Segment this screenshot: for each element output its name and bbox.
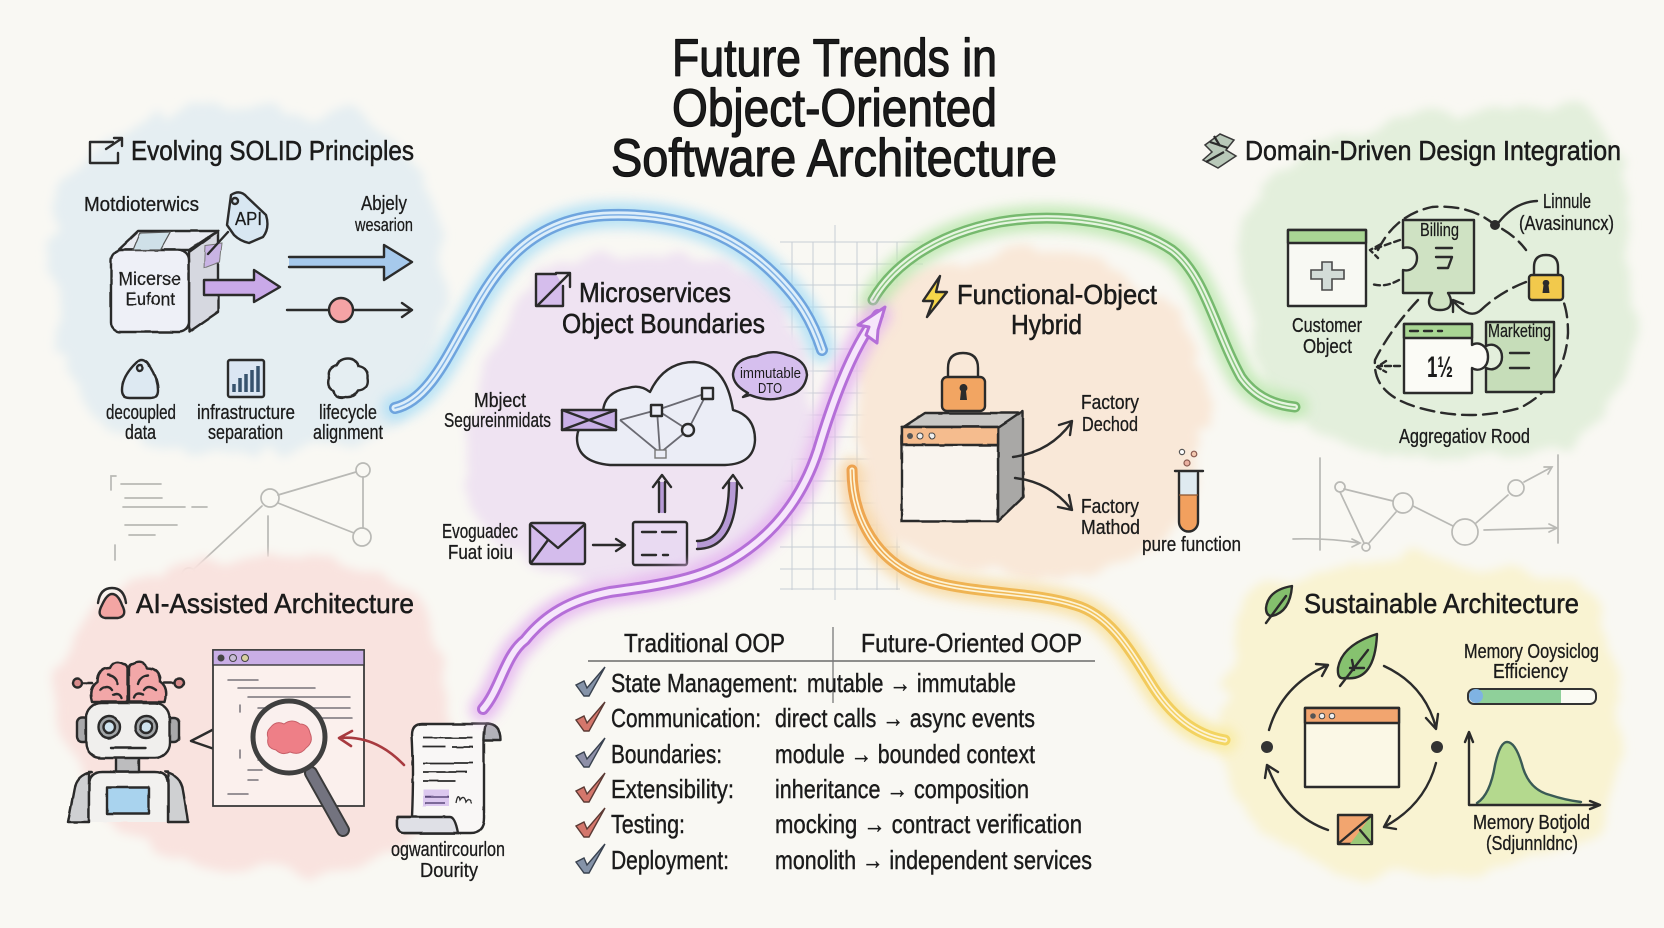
- heading: Sustainable Architecture: Sustainable Architecture: [1304, 588, 1579, 619]
- row: deployment: monolith → independent services: [775, 845, 1092, 875]
- panel: microservices object boundaries: [442, 251, 808, 582]
- label: Motdioterwics: Motdioterwics: [84, 194, 199, 216]
- arrow: lock to billing: [1453, 300, 1481, 314]
- title: [611, 29, 1057, 188]
- row: boundaries: module → bounded context: [775, 739, 1036, 769]
- label: Memory Ooysiclog Efficiency: Memory Ooysiclog: [1464, 641, 1599, 663]
- icon: lower puzzle piece: [1404, 324, 1488, 393]
- row: testing: [576, 808, 1082, 839]
- icon: scroll document: [397, 724, 500, 833]
- row: boundaries: [576, 738, 1036, 769]
- arrow: to Factory Mathod: [1015, 478, 1072, 510]
- sketch: faint network left: [111, 463, 371, 582]
- title: Software Architecture: [611, 129, 1057, 188]
- icon: customer object window: [1288, 230, 1366, 306]
- icon: large leaf: [1338, 634, 1377, 686]
- panel: functional-object hybrid: [859, 253, 1241, 576]
- label: Evoguadec Fuat ioiu: [442, 521, 518, 564]
- heading: AI-Assisted Architecture: AI-Assisted Architecture: [136, 588, 414, 619]
- row: extensibility: Extensibility:: [611, 774, 734, 804]
- label: scroll caption: Dourity: [420, 860, 478, 882]
- arrow: to Factory Dechod: [1013, 421, 1072, 457]
- callout: immutable DTO: immutable: [740, 365, 801, 382]
- icon: code window: [213, 650, 364, 806]
- heading: Microservices Object Boundaries: [536, 273, 765, 339]
- row: deployment: Deployment:: [611, 845, 729, 875]
- icon: lifecycle cloud: [328, 358, 367, 397]
- label: lifecycle alignment: lifecycle: [319, 402, 377, 424]
- icon: microservice box: Micerse: [118, 269, 181, 289]
- label: Memory Ooysiclog Efficiency: [1464, 641, 1599, 683]
- ribbon: blue flow: [395, 215, 822, 408]
- icon: boundary dot and leader: [1490, 201, 1537, 230]
- icon: object box window: [902, 411, 1023, 521]
- icon: dashed aggregate boundary: [1375, 207, 1568, 415]
- label: scroll caption: [391, 839, 505, 882]
- icon: microservice box: Eufont: [125, 289, 175, 309]
- callout: immutable DTO: [733, 352, 807, 399]
- progress bar: memory efficiency: [1468, 689, 1596, 704]
- arrow: purple: [204, 270, 280, 302]
- icon: yellow lock: [1529, 255, 1563, 300]
- icon: robot with brain: [68, 662, 188, 822]
- label: Evoguadec Fuat ioiu: Fuat ioiu: [448, 542, 513, 564]
- row: deployment: [576, 844, 1092, 875]
- row: boundaries: Boundaries:: [611, 739, 722, 769]
- table header: Future-Oriented OOP: [861, 628, 1082, 658]
- row: testing: Testing:: [611, 809, 685, 839]
- icon: billing puzzle piece: Billing: [1420, 220, 1459, 240]
- sketch: faint network right: [1293, 455, 1558, 551]
- icon: marketing puzzle piece: Marketing: [1488, 321, 1551, 341]
- heading: Microservices Object Boundaries: Object Boundaries: [562, 308, 765, 339]
- ribbon: orange-yellow flow: [852, 470, 1225, 740]
- heading: Functional-Object Hybrid: [923, 276, 1157, 340]
- panel: evolving SOLID principles: [51, 107, 443, 452]
- callout: immutable DTO: DTO: [758, 380, 782, 397]
- arrow: blue: [289, 245, 412, 280]
- label: Lnnule note: Linnule: [1543, 191, 1591, 213]
- comparison table: traditional vs future OOP: [576, 627, 1095, 875]
- label: decoupled data: [106, 402, 176, 444]
- label: Aggregatiov Rood: Aggregatiov Rood: [1399, 426, 1530, 448]
- label: Factory Mathod: Mathod: [1081, 517, 1140, 539]
- heading: Sustainable Architecture: [1266, 586, 1579, 623]
- label: Customer Object: Customer: [1292, 315, 1362, 337]
- label: decoupled data: data: [125, 422, 157, 444]
- icon: cloud with object network: [577, 362, 755, 465]
- heading: Microservices Object Boundaries: Microservices: [579, 277, 731, 308]
- label: infrastructure separation: infrastructure: [197, 402, 295, 424]
- label: Abjely: Abjely: [361, 193, 407, 215]
- label: Customer Object: Object: [1303, 336, 1352, 358]
- icon: API tag: API: [235, 209, 262, 229]
- icon: chevron callout: [191, 727, 223, 752]
- label: Memory Botjold: Memory Botjold: [1473, 812, 1590, 834]
- row: extensibility: inheritance → composition: [775, 774, 1029, 804]
- icon: padlock: [942, 353, 985, 411]
- row: communication: direct calls → async events: [775, 703, 1035, 733]
- row: communication: Communication:: [611, 703, 761, 733]
- arrow: red to magnifier: [339, 731, 404, 765]
- arrow: box up to cloud: [653, 475, 671, 513]
- ribbon: green flow: [873, 218, 1295, 407]
- row: extensibility: [576, 773, 1029, 804]
- icon: lifecycle arrows: [1261, 664, 1443, 830]
- heading: Functional-Object Hybrid: Functional-Object: [957, 279, 1157, 310]
- label: Lnnule note: [1519, 191, 1614, 235]
- icon: decoupled data: [122, 360, 158, 398]
- row: state management: State Management:: [611, 668, 798, 698]
- table header: [588, 627, 1095, 703]
- label: decoupled data: decoupled: [106, 402, 176, 424]
- label: Factory Mathod: [1081, 496, 1140, 539]
- icon: magnifier: [253, 701, 343, 830]
- arrows: dashed to customer: [1370, 240, 1400, 285]
- panel: sustainable architecture: [1219, 560, 1619, 873]
- icon: test tube: [1175, 449, 1203, 532]
- label: Memory Botjold: (Sdjunnldnc): [1486, 833, 1578, 855]
- arrow: curved up to cloud: [697, 475, 742, 549]
- label: Factory Dechod: Factory: [1081, 392, 1139, 414]
- table header: Traditional OOP: [624, 628, 785, 658]
- icon: API tag: [208, 192, 267, 254]
- label: Mbject Segureinmidats: Mbject: [474, 390, 526, 412]
- label: Factory Dechod: [1081, 392, 1139, 436]
- row: state management: mutable → immutable: [807, 668, 1016, 698]
- central sketch grid: [780, 225, 923, 600]
- icon: envelope object: [562, 410, 616, 430]
- icon: infrastructure bars: [228, 360, 264, 397]
- label: lifecycle alignment: [313, 402, 383, 444]
- label: scroll caption: ogwantircourlon: [391, 839, 505, 861]
- row: communication: [576, 702, 1035, 733]
- panel: AI-assisted architecture: [55, 556, 505, 882]
- icon: message box: [633, 522, 687, 565]
- icon: envelope event: [530, 523, 585, 564]
- label: Factory Dechod: Dechod: [1082, 414, 1138, 436]
- ribbon: purple flow with arrowhead: [483, 307, 885, 709]
- icon: window: [1305, 708, 1399, 787]
- label: Factory Mathod: Factory: [1081, 496, 1139, 518]
- label: Mbject Segureinmidats: Segureinmidats: [444, 410, 551, 432]
- arrow: envelope to box: [593, 539, 625, 551]
- label: infrastructure separation: separation: [208, 422, 283, 444]
- label: Memory Botjold: [1473, 812, 1590, 855]
- icon: microservice box: [111, 231, 222, 332]
- arrow: dashed left of lower puzzle: [1377, 361, 1400, 372]
- icon: lower puzzle piece: 1½: [1427, 351, 1453, 384]
- label: Abjely: [354, 193, 413, 235]
- title: Object-Oriented: [672, 79, 997, 138]
- arrow: line with red node: [287, 298, 412, 322]
- heading: Functional-Object Hybrid: Hybrid: [1011, 309, 1082, 340]
- icon: marketing puzzle piece: [1486, 321, 1554, 392]
- label: Abjely: wesarion: [354, 215, 413, 235]
- row: testing: mocking → contract verification: [775, 809, 1082, 839]
- panel: domain-driven design integration: [1203, 106, 1633, 462]
- row: state management: [576, 667, 1016, 698]
- heading: Domain-Driven Design Integration: Domain-Driven Design Integration: [1245, 135, 1621, 166]
- label: Mbject Segureinmidats: [444, 390, 551, 432]
- icon: billing puzzle piece: [1403, 220, 1474, 310]
- label: pure function: pure function: [1142, 534, 1241, 556]
- label: Lnnule note: (Avasinuncx): [1519, 213, 1614, 235]
- chart: memory curve: [1465, 732, 1600, 809]
- label: lifecycle alignment: alignment: [313, 422, 383, 444]
- label: Memory Ooysiclog Efficiency: Efficiency: [1493, 661, 1568, 683]
- heading: Evolving SOLID Principles: Evolving SOLID Principles: [131, 135, 414, 166]
- icon: colored square: [1338, 815, 1372, 844]
- label: Customer Object: [1292, 315, 1362, 358]
- label: infrastructure separation: [197, 402, 295, 444]
- title: Future Trends in: [672, 29, 997, 88]
- label: Evoguadec Fuat ioiu: Evoguadec: [442, 521, 518, 543]
